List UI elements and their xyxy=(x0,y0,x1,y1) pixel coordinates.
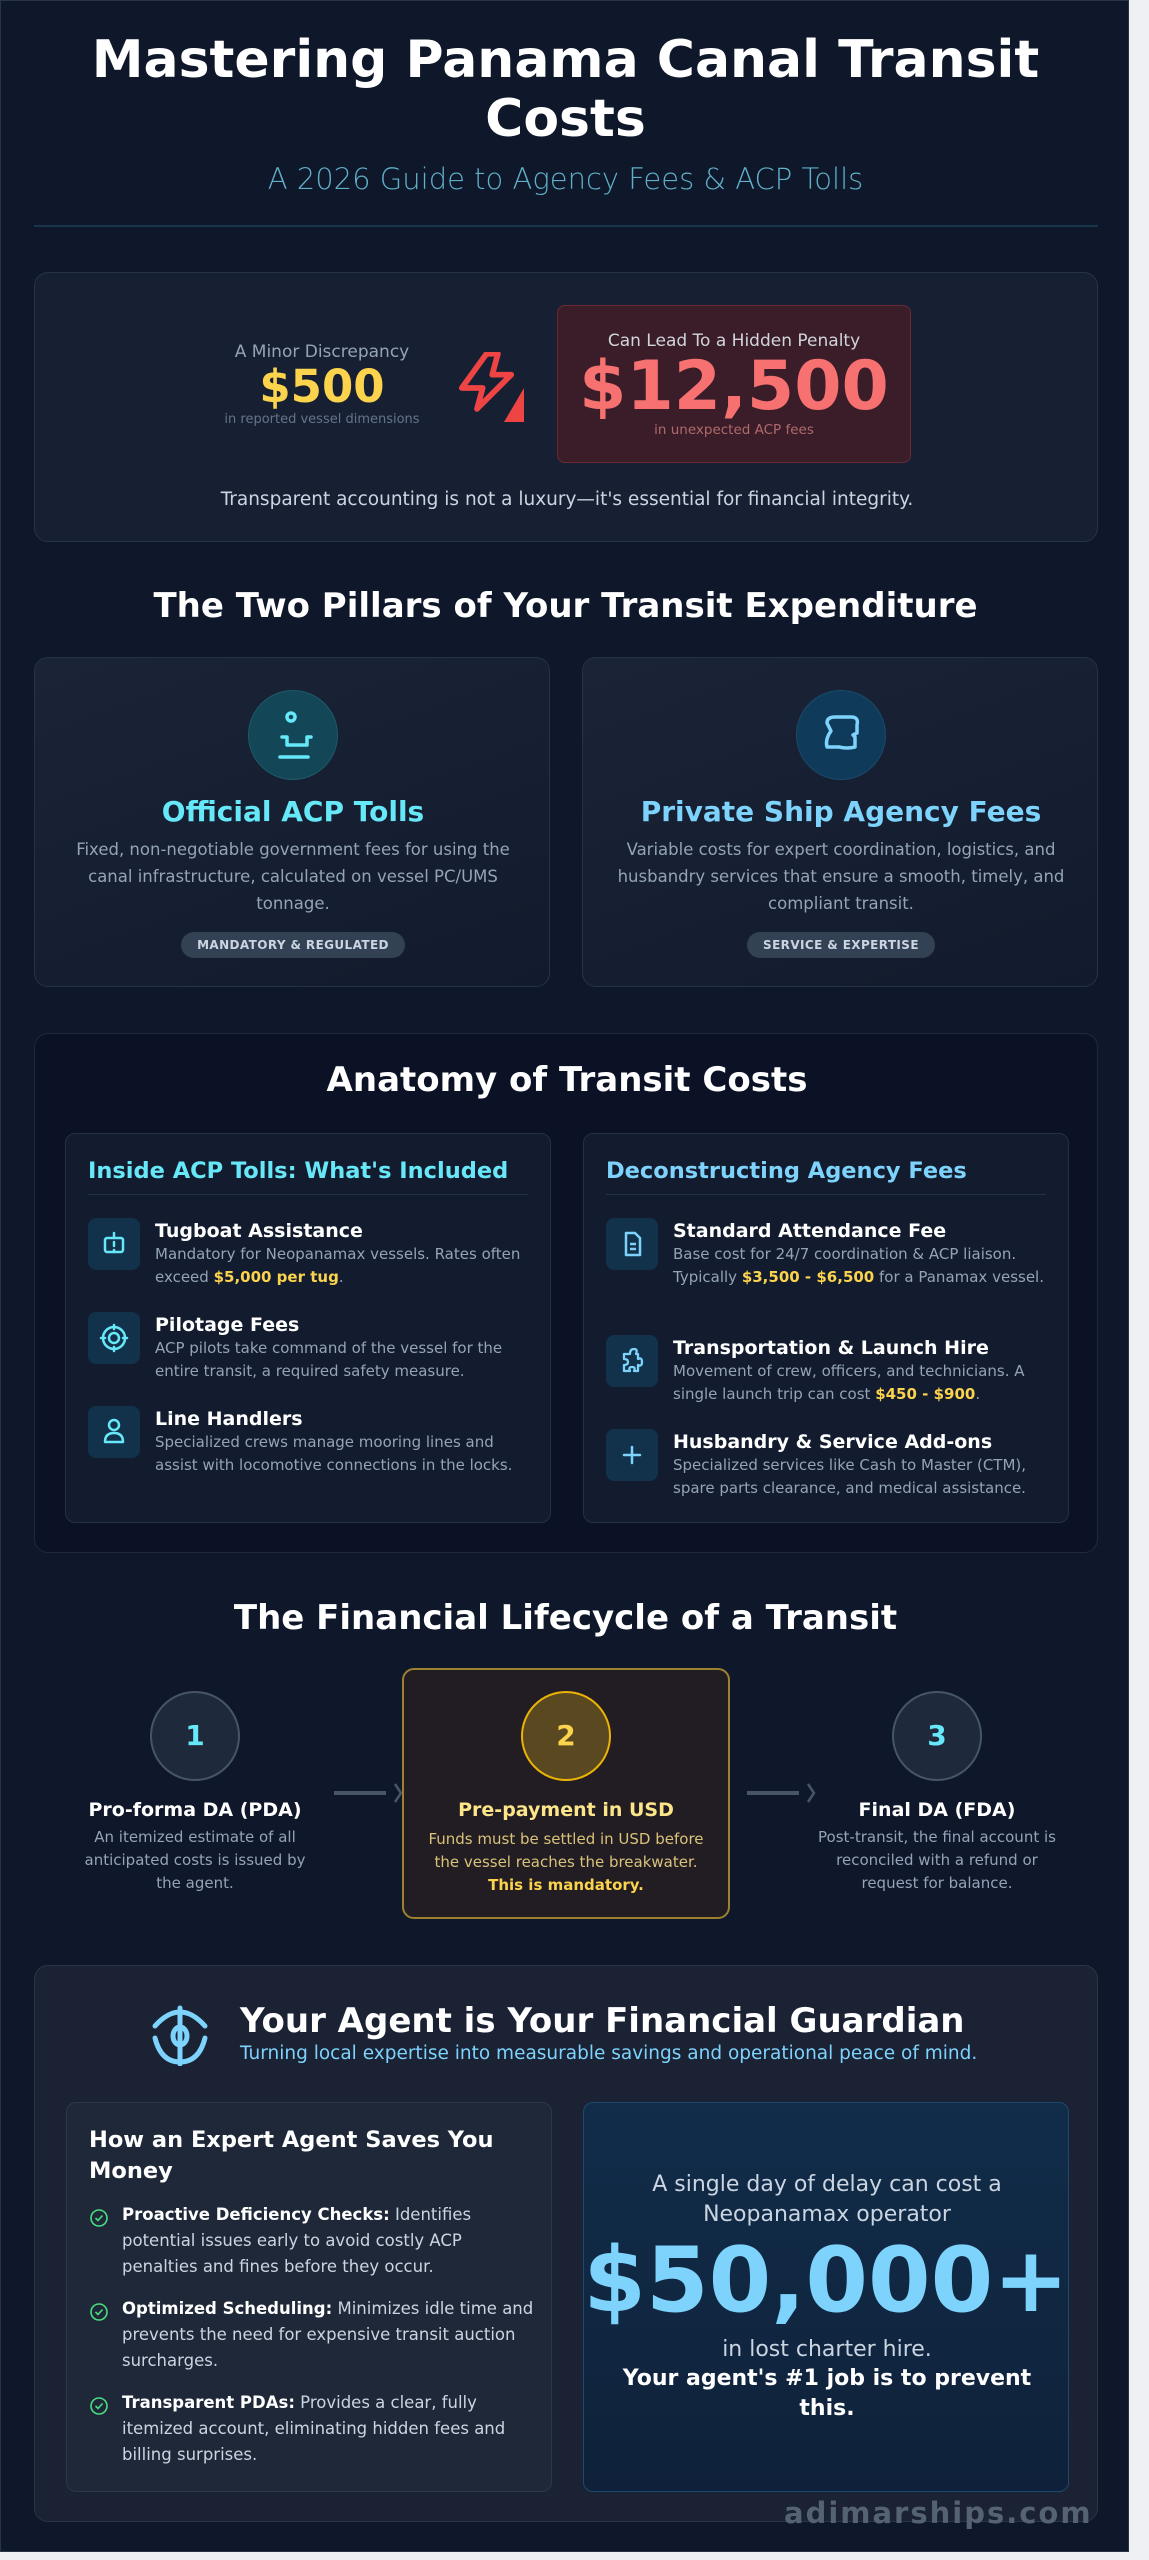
step 2 highlighted: Pre-payment in USD xyxy=(458,1799,674,1821)
icon: puzzle xyxy=(606,1335,658,1387)
step 2 highlighted xyxy=(402,1668,730,1919)
item: tugboat: Mandatory for Neopanamax vessels. Rates often exceed $5,000 per tug. xyxy=(155,1245,520,1286)
description: Variable costs for expert coordination, logistics, and husbandry services that ensure a smooth, timely, and compliant transit. xyxy=(618,840,1064,913)
title xyxy=(92,30,1039,149)
icon: person xyxy=(88,1406,140,1458)
item: transportation: Movement of crew, officers, and technicians. A single launch trip can cost $450 - $900. xyxy=(673,1362,1024,1403)
heading: Inside ACP Tolls: What's Included xyxy=(88,1158,508,1184)
item: pilotage xyxy=(88,1312,502,1380)
item: tugboat: Tugboat Assistance xyxy=(155,1220,363,1242)
bullet 3: Transparent PDAs: Provides a clear, fully itemized account, eliminating hidden fees and billing surprises. xyxy=(122,2393,505,2464)
title: Costs xyxy=(485,89,646,149)
text: transparent accounting: Transparent accounting is not a luxury—it's essential for financial integrity. xyxy=(221,489,913,510)
icon: document xyxy=(606,1218,658,1270)
text: minor discrepancy: A Minor Discrepancy xyxy=(235,342,409,362)
icon: tugboat xyxy=(88,1218,140,1270)
icon: guardian xyxy=(152,2006,208,2066)
panel: agent guardian xyxy=(34,1965,1098,2522)
step 3 xyxy=(818,1691,1056,1892)
subtitle: Turning local expertise into measurable savings and operational peace of mind. xyxy=(240,2043,977,2064)
panel: cost of delay xyxy=(583,2102,1069,2492)
item: pilotage: Pilotage Fees xyxy=(155,1314,299,1336)
title: Mastering Panama Canal Transit xyxy=(92,30,1039,90)
item: husbandry: Specialized services like Cash to Master (CTM), spare parts clearance, and medical assistance. xyxy=(673,1456,1026,1497)
item: line handlers xyxy=(88,1406,512,1474)
item: transportation: Transportation & Launch Hire xyxy=(673,1337,989,1359)
icon: number 2: 2 xyxy=(556,1719,576,1752)
panel: penalty callout xyxy=(34,272,1098,542)
description: Fixed, non-negotiable government fees for using the canal infrastructure, calculated on vessel PC/UMS tonnage. xyxy=(76,840,510,913)
item: husbandry xyxy=(606,1429,1026,1497)
icon: handshake xyxy=(796,690,886,780)
item: line handlers: Line Handlers xyxy=(155,1408,303,1430)
icon: check xyxy=(90,2209,108,2227)
title: Private Ship Agency Fees xyxy=(641,795,1041,828)
text: minor discrepancy: in reported vessel dimensions xyxy=(224,412,420,427)
panel: cost of delay: in lost charter hire. xyxy=(722,2337,932,2362)
badge xyxy=(747,932,935,958)
icon: plus xyxy=(606,1429,658,1481)
footer: website: adimarships.com xyxy=(784,2496,1093,2530)
panel: private agency fees xyxy=(582,657,1098,987)
title: Your Agent is Your Financial Guardian xyxy=(240,2001,965,2041)
step 2 highlighted: This is mandatory. xyxy=(488,1876,644,1894)
heading: Anatomy of Transit Costs xyxy=(327,1060,807,1100)
item: line handlers: Specialized crews manage mooring lines and assist with locomotive connections in the locks. xyxy=(155,1433,512,1474)
panel: inside ACP tolls xyxy=(65,1133,551,1523)
box: hidden penalty: Can Lead To a Hidden Penalty xyxy=(608,331,860,351)
arrow 1 xyxy=(334,1784,402,1802)
step 3: Post-transit, the final account is reconciled with a refund or request for balance. xyxy=(818,1828,1056,1892)
icon: check xyxy=(90,2303,108,2321)
item: pilotage: ACP pilots take command of the vessel for the entire transit, a required safety measure. xyxy=(155,1339,502,1380)
arrow 2 xyxy=(747,1784,816,1802)
item: attendance fee: Standard Attendance Fee xyxy=(673,1220,946,1242)
panel: cost of delay: Your agent's #1 job is to prevent this. xyxy=(623,2366,1031,2421)
step 1 xyxy=(85,1691,305,1892)
icon: ship xyxy=(248,690,338,780)
bullet 2: Optimized Scheduling: Minimizes idle time and prevents the need for expensive transit auction surcharges. xyxy=(122,2299,533,2370)
panel: how agent saves: How an Expert Agent Saves You Money xyxy=(89,2127,494,2184)
icon: check xyxy=(90,2397,108,2415)
item: tugboat xyxy=(88,1218,520,1286)
panel: how agent saves xyxy=(66,2102,552,2492)
icon: target xyxy=(88,1312,140,1364)
step 1: Pro-forma DA (PDA) xyxy=(88,1799,302,1821)
heading: financial lifecycle: The Financial Lifecycle of a Transit xyxy=(234,1598,897,1638)
icon: number 1 xyxy=(150,1691,240,1781)
badge: SERVICE & EXPERTISE xyxy=(763,938,919,952)
step 1: An itemized estimate of all anticipated costs is issued by the agent. xyxy=(85,1828,305,1892)
big number: $50,000+ xyxy=(583,2228,1069,2333)
item: transportation xyxy=(606,1335,1024,1403)
item: attendance fee xyxy=(606,1218,1044,1286)
panel: deconstructing agency fees xyxy=(583,1133,1069,1523)
step 2 highlighted: Funds must be settled in USD before the vessel reaches the breakwater. xyxy=(428,1830,704,1871)
text: minor discrepancy: $500 xyxy=(259,360,385,413)
bullet 1: Proactive Deficiency Checks: Identifies potential issues early to avoid costly ACP penalties and fines before they occur. xyxy=(122,2205,471,2276)
badge: MANDATORY & REGULATED xyxy=(197,938,389,952)
box: hidden penalty xyxy=(557,305,911,463)
step 3: Final DA (FDA) xyxy=(859,1799,1015,1821)
badge xyxy=(181,932,405,958)
subtitle: A 2026 Guide to Agency Fees & ACP Tolls xyxy=(268,162,863,196)
icon: lightning xyxy=(458,352,524,422)
panel: official ACP tolls xyxy=(34,657,550,987)
icon: number 3: 3 xyxy=(927,1719,947,1752)
title: Official ACP Tolls xyxy=(162,795,424,828)
text: minor discrepancy xyxy=(224,342,420,427)
heading: Deconstructing Agency Fees xyxy=(606,1158,967,1184)
icon: number 2 xyxy=(521,1691,611,1781)
box: hidden penalty: in unexpected ACP fees xyxy=(654,422,814,438)
item: attendance fee: Base cost for 24/7 coordination & ACP liaison. Typically $3,500 - $6,500 for a Panamax vessel. xyxy=(673,1245,1044,1286)
item: husbandry: Husbandry & Service Add-ons xyxy=(673,1431,992,1453)
box: hidden penalty: $12,500 xyxy=(579,347,889,426)
icon: number 3 xyxy=(892,1691,982,1781)
heading: two pillars: The Two Pillars of Your Transit Expenditure xyxy=(153,586,978,626)
panel: cost of delay: A single day of delay can cost a Neopanamax operator xyxy=(652,2172,1002,2227)
panel: anatomy of transit costs xyxy=(34,1033,1098,1553)
icon: number 1: 1 xyxy=(185,1719,205,1752)
